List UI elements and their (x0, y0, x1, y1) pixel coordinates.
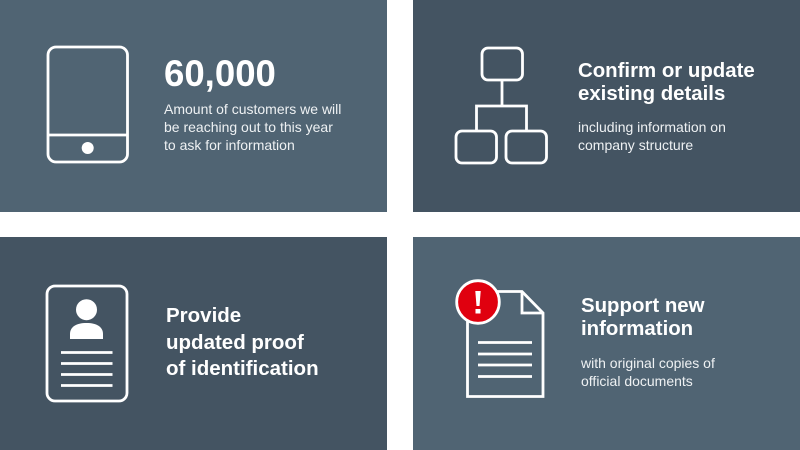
text: confirm description (578, 119, 726, 153)
heading: provide updated proof: of identification (166, 357, 319, 380)
heading: confirm or update (578, 60, 755, 105)
text: customers description: Amount of customers we will (164, 101, 341, 117)
text: support description (581, 355, 715, 389)
text: confirm description: company structure (578, 137, 693, 153)
text: customers description: to ask for information (164, 137, 295, 153)
icon: tablet (46, 46, 129, 164)
heading: provide updated proof (166, 304, 319, 380)
heading: provide updated proof: Provide (166, 304, 241, 327)
heading: confirm or update: existing details (578, 83, 725, 105)
heading: confirm or update: Confirm or update (578, 60, 755, 82)
heading: support new information: Support new (581, 295, 704, 317)
heading: provide updated proof: updated proof (166, 330, 304, 354)
text: support description: with original copies of (581, 355, 715, 371)
heading: support new information: information (581, 318, 693, 340)
panel: customers (0, 0, 387, 212)
text: support description: official documents (581, 373, 693, 389)
panel: support new information (413, 237, 800, 450)
panel: confirm details (413, 0, 800, 212)
text: confirm description: including information on (578, 119, 726, 135)
stat: 60,000: 60,000 (164, 53, 276, 94)
text: customers description (164, 101, 341, 153)
text: customers description: be reaching out to this year (164, 119, 333, 135)
heading: support new information (581, 295, 704, 340)
panel: proof of identification (0, 237, 387, 450)
icon: ID card (46, 284, 128, 402)
icon: document with alert (455, 279, 544, 398)
icon: org chart (454, 46, 548, 164)
